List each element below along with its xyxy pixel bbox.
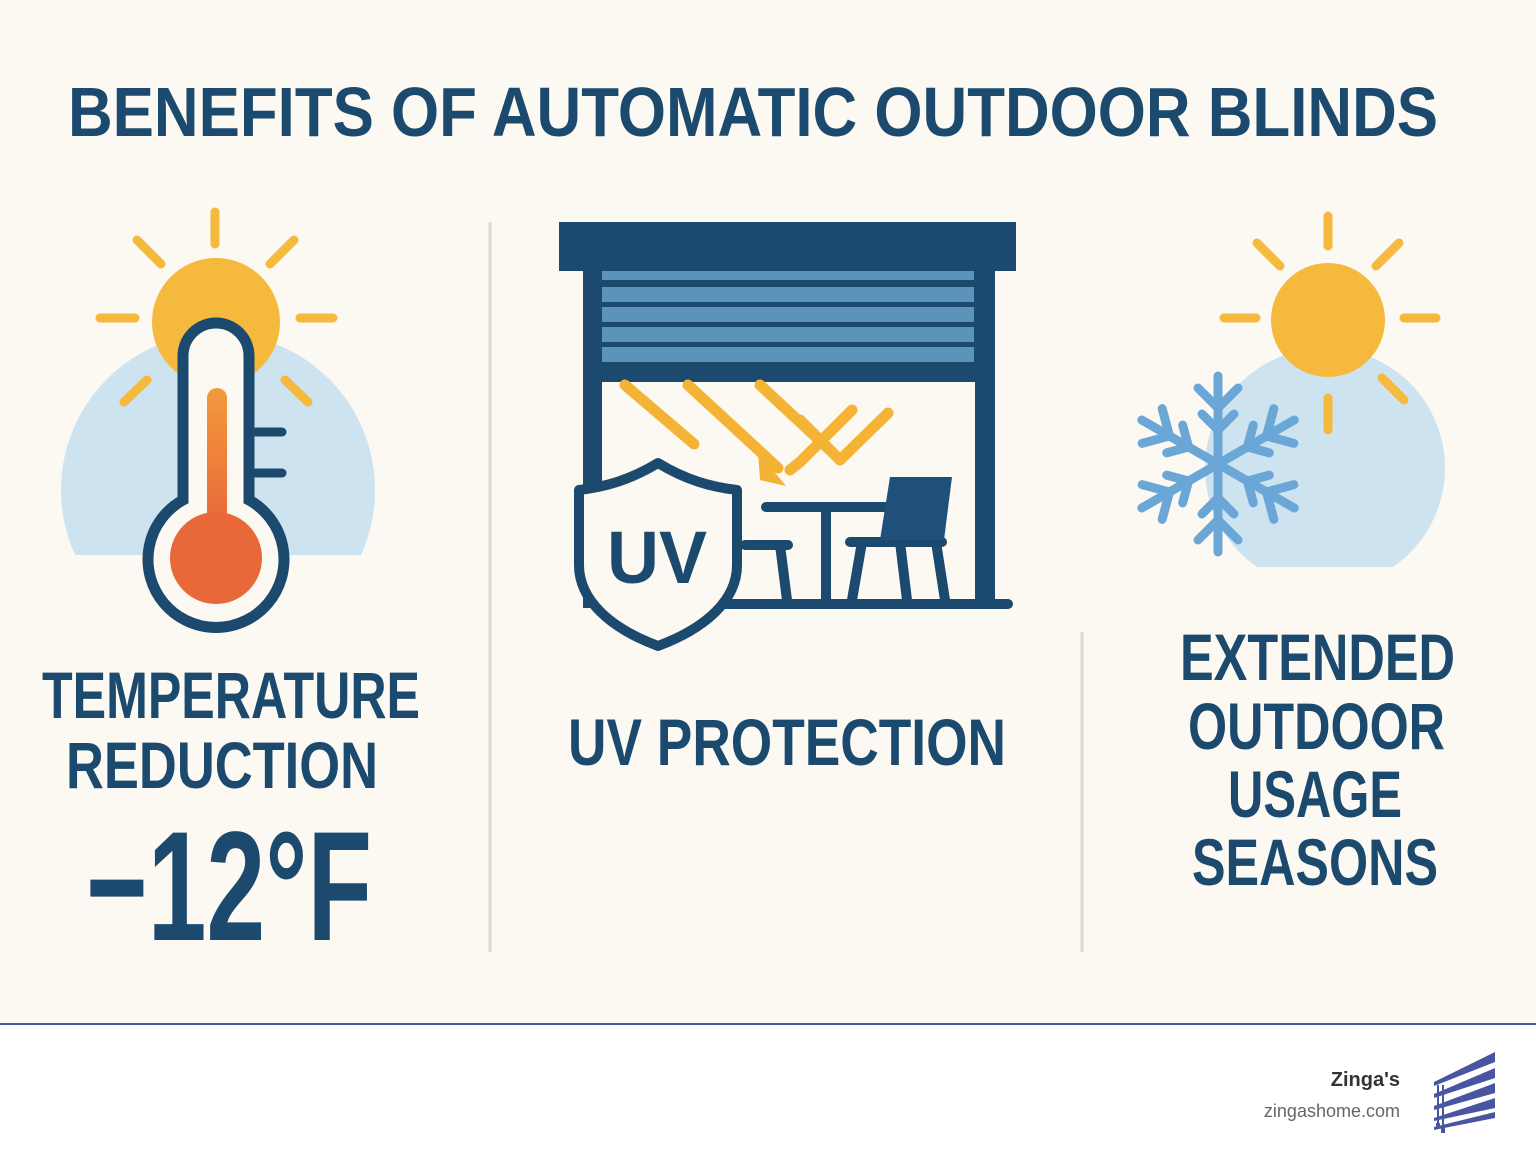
stat: -12°F: −12°F xyxy=(86,800,372,974)
icon: blinds logo xyxy=(1434,1052,1495,1133)
panel: extended seasons xyxy=(1132,216,1455,899)
label: temperature reduction: TEMPERATURE xyxy=(42,658,420,732)
label: temperature reduction xyxy=(42,658,420,802)
label: extended outdoor usage seasons xyxy=(1180,620,1455,899)
icon: blind with UV shield: UV xyxy=(607,516,707,599)
icon: blind with UV shield xyxy=(559,222,1016,646)
label: UV protection: UV PROTECTION xyxy=(568,705,1006,779)
label: extended outdoor usage seasons: EXTENDED xyxy=(1180,620,1455,694)
brand url: zingashome.com xyxy=(1264,1101,1400,1121)
panel: temperature reduction xyxy=(42,212,420,974)
label: extended outdoor usage seasons: USAGE xyxy=(1228,757,1402,831)
label: extended outdoor usage seasons: OUTDOOR xyxy=(1188,689,1445,763)
label: temperature reduction: REDUCTION xyxy=(66,728,378,802)
footer xyxy=(0,1023,1536,1154)
icon: sun and thermometer xyxy=(61,212,375,647)
icon: sun and snowflake xyxy=(1132,216,1445,588)
panel: UV protection xyxy=(559,222,1016,779)
brand name: Zinga's xyxy=(1331,1069,1400,1091)
label: extended outdoor usage seasons: SEASONS xyxy=(1192,825,1438,899)
